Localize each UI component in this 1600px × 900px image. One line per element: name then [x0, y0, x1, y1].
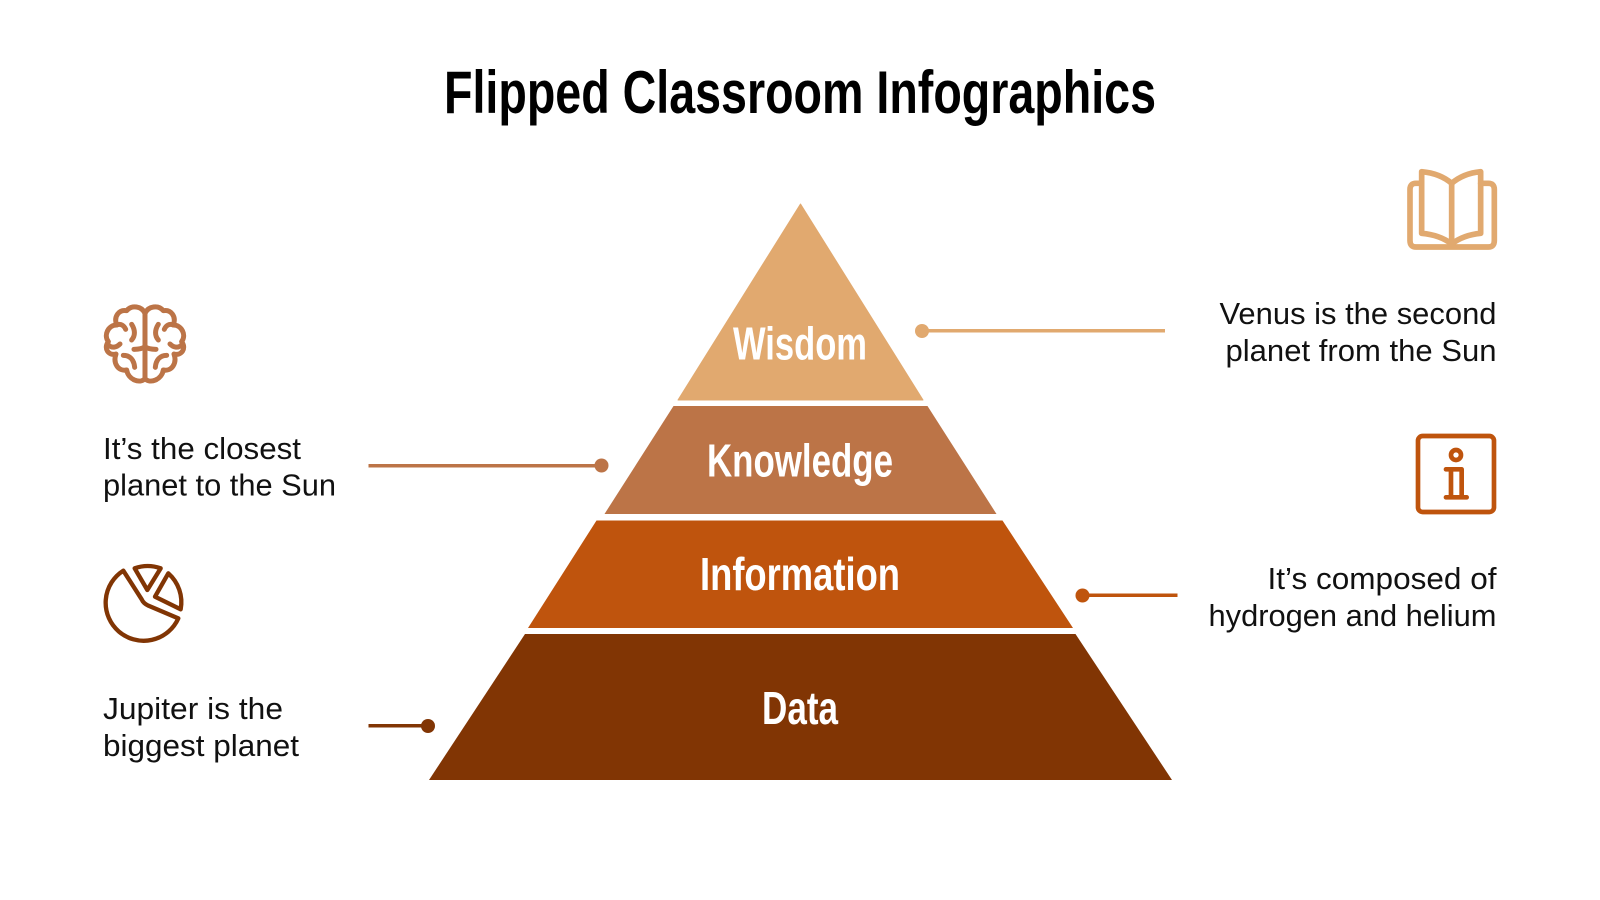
- text: Venus: Venus is the second: [1220, 296, 1496, 331]
- pyramid: [429, 204, 1172, 780]
- tier: Data: Data: [762, 682, 838, 734]
- connector: Wisdom: [915, 324, 1165, 338]
- connector: Knowledge: [368, 458, 608, 472]
- tier: Wisdom: [678, 204, 923, 400]
- text: Jupiter: Jupiter is the: [103, 691, 283, 726]
- icon: brain: [106, 307, 184, 381]
- icon: open book: [1410, 172, 1494, 247]
- text: closest planet: planet to the Sun: [103, 468, 336, 502]
- connector: Information: [1076, 588, 1178, 602]
- tier: Knowledge: [604, 406, 996, 514]
- text: Venus: planet from the Sun: [1226, 333, 1496, 368]
- text: hydrogen: [1208, 561, 1497, 633]
- tier: Information: [528, 520, 1073, 628]
- text: Jupiter: [103, 691, 299, 763]
- text: hydrogen: hydrogen and helium: [1208, 598, 1496, 633]
- connector: Data: [368, 719, 435, 733]
- tier: Knowledge: Knowledge: [707, 434, 893, 486]
- tier: Information: Information: [700, 548, 900, 600]
- title: Flipped Classroom Infographics: [444, 59, 1156, 126]
- text: closest planet: [103, 431, 336, 502]
- tier: Data: [429, 634, 1172, 780]
- tier: Wisdom: Wisdom: [733, 318, 867, 370]
- icon: information box: [1418, 436, 1494, 512]
- text: hydrogen: It’s composed of: [1268, 561, 1497, 596]
- text: closest planet: It’s the closest: [103, 431, 301, 466]
- text: Venus: [1220, 296, 1496, 368]
- icon: pie chart: [106, 566, 181, 641]
- text: Jupiter: biggest planet: [103, 728, 299, 763]
